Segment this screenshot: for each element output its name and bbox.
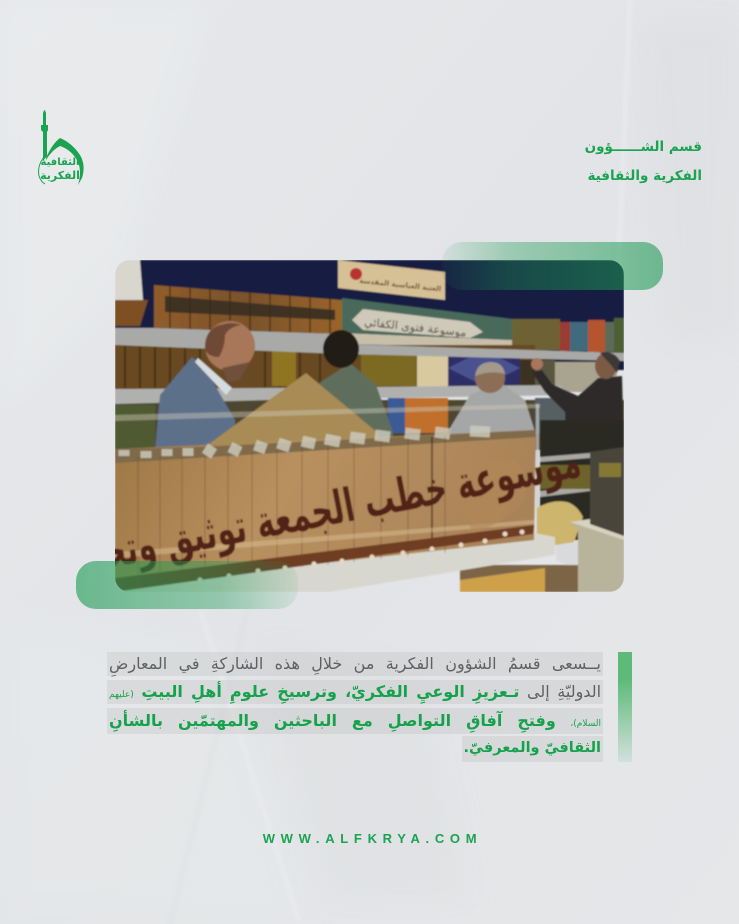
right shelves: [540, 420, 624, 540]
heading: department name: الفكرية والثقافية: [587, 168, 702, 184]
yellow chair: [537, 501, 583, 545]
right top books: [512, 319, 560, 350]
glass rail: [115, 404, 540, 421]
footer: website: WWW.ALFKRYA.COM: [263, 831, 482, 846]
green pill bottom left: [76, 561, 298, 609]
sign: [338, 260, 445, 300]
sign: العتبة العباسية المقدسة: [359, 277, 442, 293]
second shelf: [115, 385, 570, 404]
text block: description: السلام)، وفتحِ آفاقِ التواصلِ مع الباحثين والمهتمّين بالشأنِ: [109, 711, 601, 730]
man in dark suit: [530, 351, 624, 420]
text block: description: الدوليّةِ إلى تـعزيزِ الوعيِ الفكريّ، وترسيخِ علومِ أهلِ البيتِ (عليهم: [109, 682, 601, 701]
heading: department name: قسم الشــــــؤون: [585, 139, 702, 155]
second row books: [115, 345, 535, 395]
gold acrylic tent: [205, 373, 378, 447]
low furniture: [460, 565, 578, 592]
green title panel: [342, 298, 512, 340]
green title panel: موسوعة فتوى الكفائي: [364, 316, 467, 339]
text block: description: يــسعى قسمُ الشؤون الفكرية من خلالِ هذه الشاركةِ في المعارضِ: [109, 654, 601, 673]
heading: department name: [585, 139, 702, 184]
logo calligraphy: الثقافية: [41, 157, 79, 168]
display counter: [570, 522, 624, 592]
man in blue suit: [155, 321, 255, 450]
stack of magazines: [556, 540, 578, 566]
back wall: [115, 260, 624, 370]
logo: [38, 110, 84, 185]
third row: [115, 400, 624, 450]
glass case of books: [590, 447, 624, 536]
logo: الفكرية: [40, 169, 80, 182]
first shelf: [115, 328, 624, 361]
man in grey coat: [450, 362, 535, 445]
icon: minaret: [41, 110, 48, 161]
accent bar: [618, 652, 632, 762]
poster left: [115, 260, 143, 300]
white base: [115, 530, 555, 592]
green pill top right: [442, 242, 663, 290]
text block: description: [107, 652, 603, 762]
photo: book fair stand: [115, 260, 624, 592]
text block: description: الثقافيّ والمعرفيّ.: [464, 740, 601, 756]
man in green hoodie: [316, 330, 393, 440]
icon: dome outline: [46, 138, 84, 185]
top row books: [154, 285, 342, 334]
